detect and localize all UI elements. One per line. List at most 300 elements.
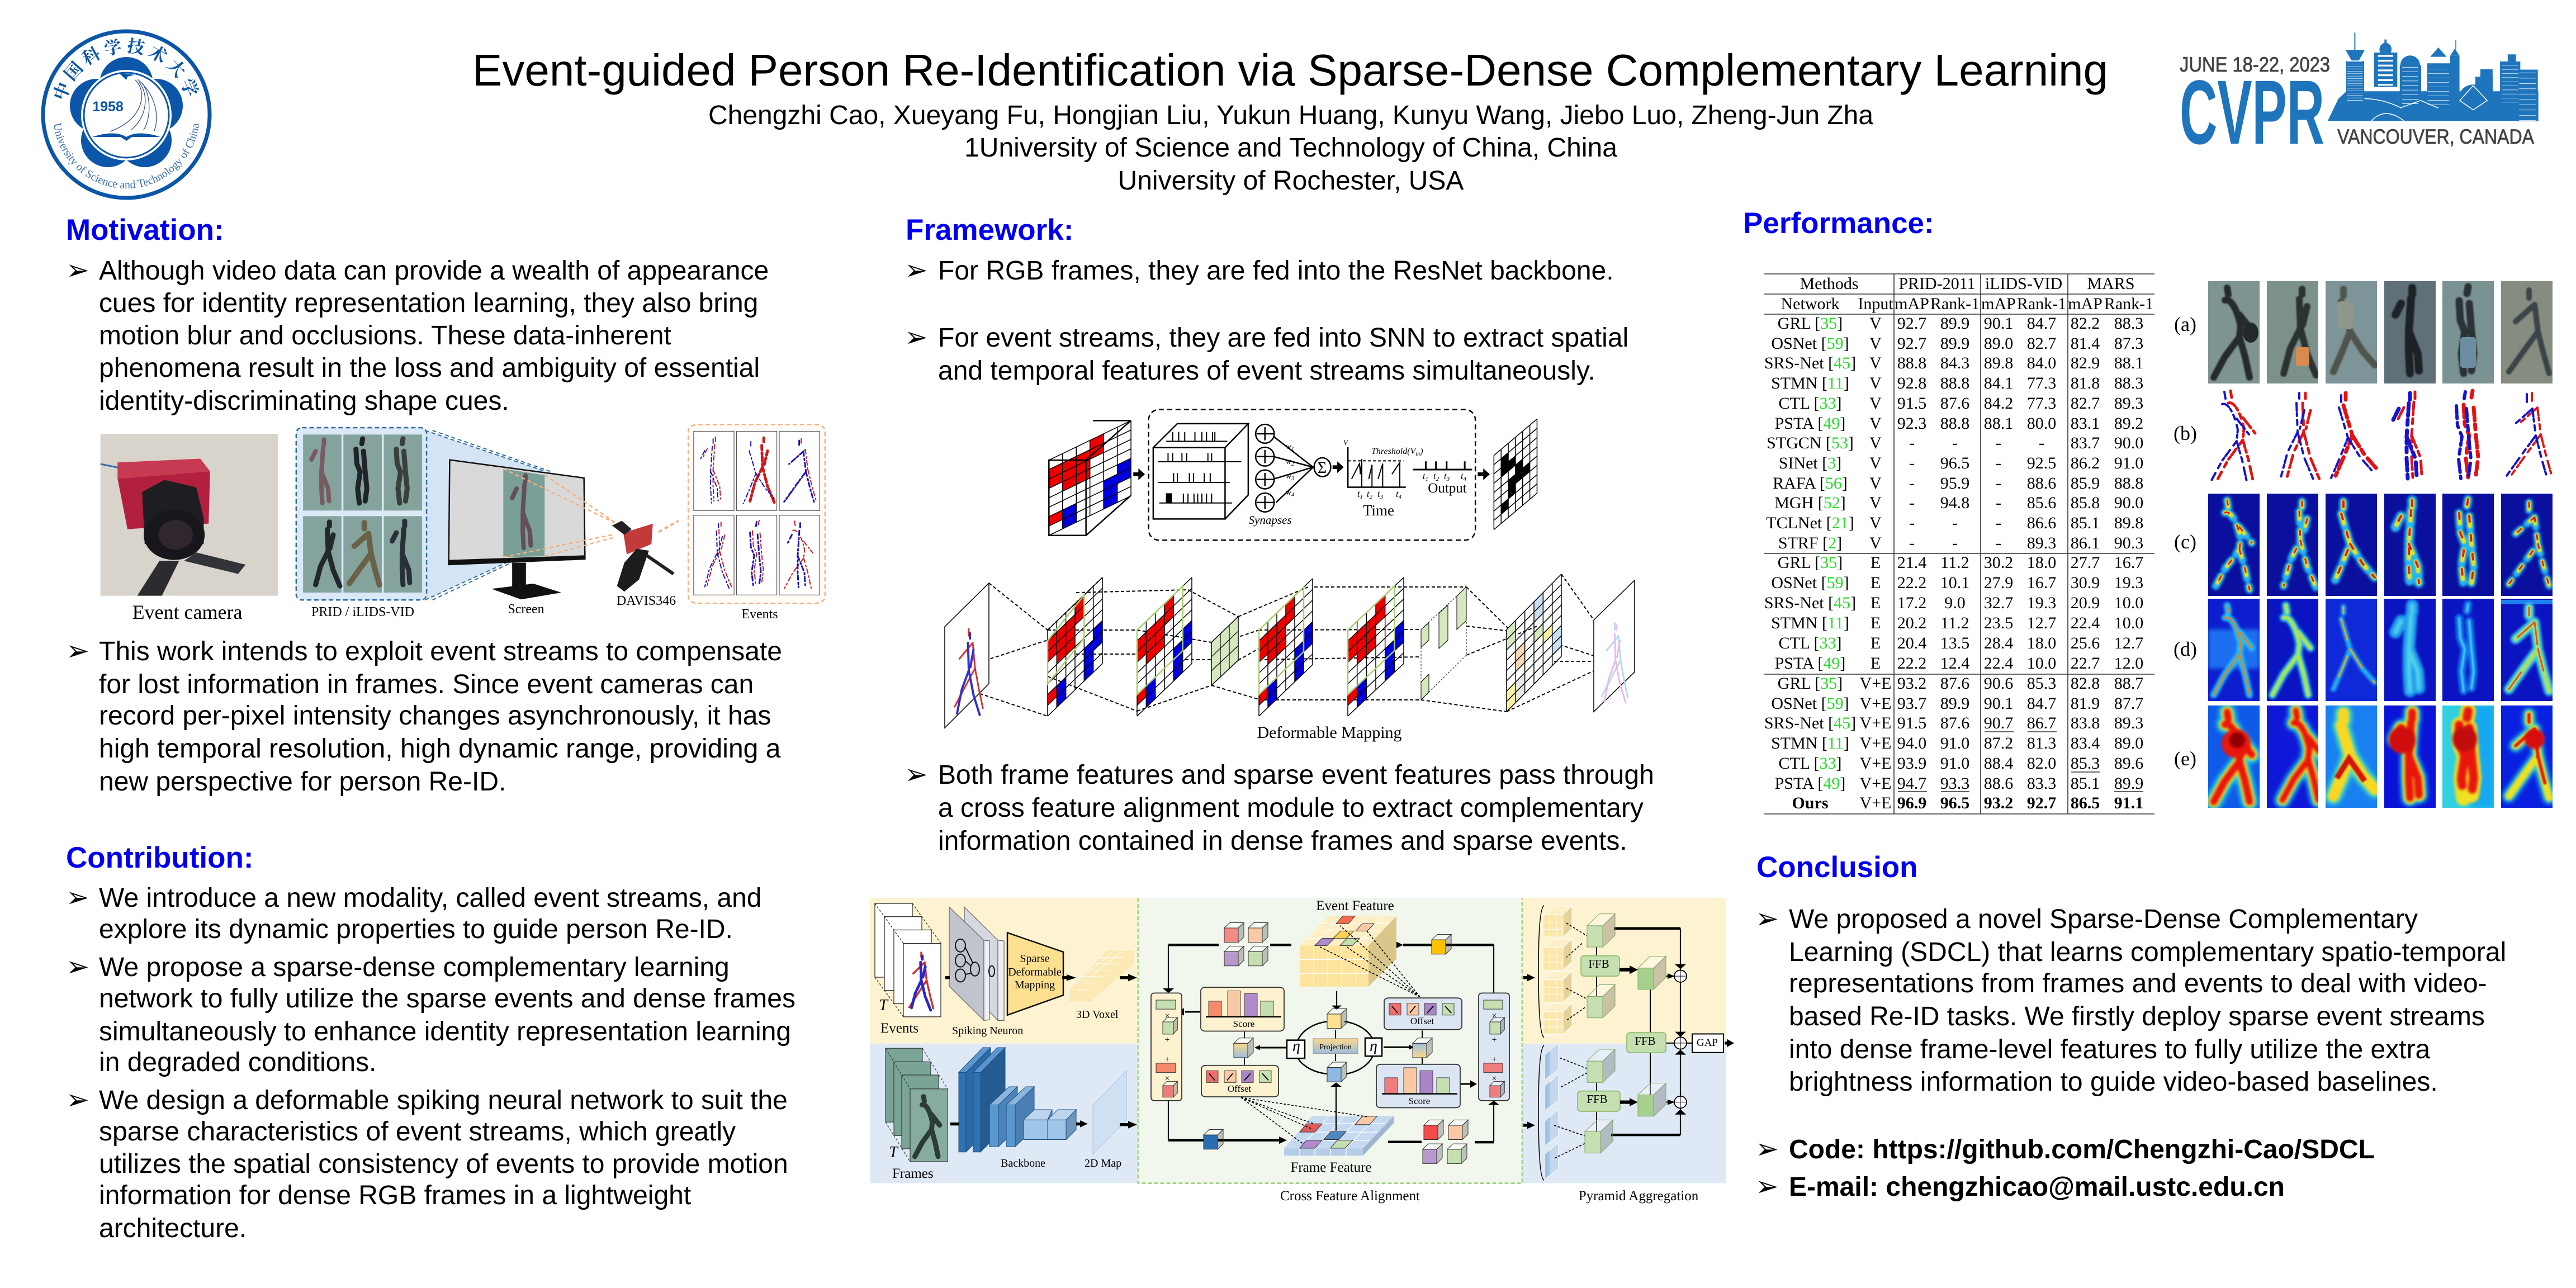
table: comparison results: 82.0	[2027, 754, 2056, 773]
logo: USTC university seal: 中国科学技术大学	[54, 37, 199, 99]
labels: architecture captions: 3D Voxel	[1076, 1008, 1119, 1021]
table: comparison results: 88.3	[2114, 314, 2143, 333]
input event cube	[1049, 420, 1131, 536]
table: comparison results: 83.1	[2071, 414, 2100, 433]
text block: conclusion summary: into dense frame-level features to fully utilize the extra	[1789, 1035, 2431, 1064]
text block: contribution bullets: ➢	[66, 950, 89, 983]
table: comparison results: E	[1871, 574, 1881, 592]
row d: frame feature heat maps	[2208, 599, 2553, 701]
labels: SNN captions: t	[1461, 471, 1464, 481]
table: comparison results: 84.0	[2027, 354, 2056, 372]
table: comparison results: 84.1	[1984, 374, 2013, 392]
labels: SNN captions: th	[1415, 451, 1420, 457]
table: comparison results: -	[1996, 494, 2001, 512]
labels: capture setup captions: PRID / iLIDS-VID	[311, 605, 414, 619]
table: comparison results: 85.9	[2071, 474, 2100, 493]
table: comparison results: 89.0	[1984, 334, 2013, 353]
labels: SNN captions: 3	[1291, 476, 1294, 482]
table: comparison results: STMN [11]	[1771, 614, 1849, 632]
text block: code and email links: Code: https://github.com/Chengzhi-Cao/SDCL	[1789, 1135, 2375, 1164]
table: comparison results: 22.2	[1897, 574, 1926, 592]
text block: contribution bullets: architecture.	[99, 1214, 247, 1243]
labels: architecture captions: Frames	[892, 1166, 934, 1181]
table: comparison results: 85.3	[2027, 674, 2056, 693]
labels: architecture captions: +	[1491, 1055, 1497, 1064]
table: comparison results: 85.8	[2071, 494, 2100, 512]
panel: performance	[1743, 207, 2553, 814]
table: comparison results: V	[1869, 434, 1882, 452]
offset panel (bottom)	[1201, 1066, 1278, 1097]
labels: architecture captions: +	[1164, 1035, 1170, 1045]
panel: motivation	[66, 214, 825, 797]
table: comparison results: 22.7	[2071, 654, 2100, 673]
text block: motivation second bullet: record per-pixel intensity changes asynchronously, it has	[99, 701, 771, 731]
table: comparison results: 84.2	[1984, 394, 2013, 413]
table: comparison results: E	[1871, 654, 1881, 673]
table: comparison results: 12.0	[2114, 654, 2143, 673]
labels: capture setup captions	[132, 594, 778, 623]
table: comparison results: Network	[1781, 295, 1839, 313]
labels: architecture captions: +	[1164, 1055, 1170, 1064]
table: comparison results: mAP	[1895, 295, 1929, 313]
score panel (top)	[1201, 987, 1284, 1031]
heading: framework: Framework:	[906, 214, 1073, 247]
text block: framework bullets top	[905, 254, 1628, 386]
table: comparison results: STRF [2]	[1778, 534, 1842, 552]
table: comparison results: 20.2	[1897, 614, 1926, 632]
labels: architecture captions: ×	[1491, 1074, 1497, 1083]
table: comparison results: SRS-Net [45]	[1764, 594, 1856, 612]
labels: architecture captions: Cross Feature Alignment	[1280, 1188, 1420, 1204]
table: comparison results: 11.2	[1940, 614, 1969, 632]
table: comparison results: MGH [52]	[1774, 494, 1846, 512]
table: comparison results: 84.7	[2027, 694, 2056, 713]
table: comparison results: 83.3	[2027, 774, 2056, 793]
text block: code and email links: ➢	[1755, 1133, 1779, 1165]
table: comparison results: 19.3	[2027, 594, 2056, 612]
table: comparison results: TCLNet [21]	[1766, 514, 1854, 532]
heading: performance: Performance:	[1743, 207, 1934, 240]
table: comparison results: 81.4	[2071, 334, 2100, 353]
table: comparison results: PSTA [49]	[1775, 414, 1845, 433]
input event image	[945, 583, 989, 728]
event sheets	[875, 903, 941, 1017]
text block: motivation second bullet: high temporal resolution, high dynamic range, providing a	[99, 734, 781, 764]
text block: contribution bullets: information for dense RGB frames in a lightweight	[99, 1181, 691, 1210]
table: comparison results: 82.2	[2071, 314, 2100, 333]
table: comparison results: 87.6	[1940, 714, 1969, 732]
table: comparison results: 90.3	[2114, 534, 2143, 552]
labels: SNN captions: Time	[1363, 502, 1394, 519]
table: comparison results: 93.2	[1984, 794, 2013, 812]
labels: visualization row labels: (e)	[2174, 747, 2196, 770]
labels: architecture captions: Event Feature	[1316, 898, 1394, 913]
labels: architecture captions: Sparse	[1020, 953, 1050, 965]
table: comparison results: E	[1871, 614, 1881, 632]
labels: visualization row labels: (c)	[2174, 531, 2196, 553]
table: comparison results: 88.8	[1897, 354, 1926, 372]
table: comparison results: V	[1869, 374, 1882, 392]
labels: architecture captions: +	[1491, 1035, 1497, 1045]
frame feature plate	[1241, 1097, 1394, 1156]
table: comparison results: V+E	[1860, 694, 1891, 713]
table: comparison results: 88.3	[2114, 374, 2143, 392]
labels: architecture captions: 2D Map	[1085, 1157, 1121, 1169]
labels: SNN captions: Output	[1428, 481, 1467, 496]
dashed green grid	[1421, 587, 1466, 700]
text block: framework third bullet	[905, 758, 1654, 856]
table: comparison results: 32.7	[1984, 594, 2013, 612]
table: comparison results: -	[1996, 454, 2001, 472]
text block: contribution bullets	[66, 881, 795, 1243]
table: comparison results: 28.4	[1984, 634, 2013, 652]
table: comparison results: 83.8	[2071, 714, 2100, 732]
text block: motivation second bullet: new perspective for person Re-ID.	[99, 767, 506, 797]
table: comparison results: OSNet [59]	[1771, 334, 1849, 353]
table: comparison results: PSTA [49]	[1775, 654, 1845, 673]
dashed connectors	[953, 574, 1594, 716]
table: comparison results: V	[1869, 454, 1882, 472]
table: comparison results: MARS	[2087, 274, 2135, 293]
labels: SNN captions: t	[1444, 471, 1447, 481]
table: comparison results: 94.8	[1940, 494, 1969, 512]
text block: motivation first bullet: cues for identity representation learning, they also bring	[99, 288, 758, 318]
text block: motivation second bullet	[66, 634, 782, 797]
table: comparison results: 87.6	[1940, 674, 1969, 693]
table: comparison results: OSNet [59]	[1771, 694, 1849, 713]
labels: capture setup captions: Event camera	[132, 601, 242, 623]
table: comparison results: -	[1909, 534, 1915, 552]
table: comparison results: V	[1869, 474, 1882, 493]
table: comparison results: 81.3	[2027, 734, 2056, 752]
table: comparison results: mAP	[1981, 295, 2016, 313]
offset panel (top)	[1384, 998, 1462, 1030]
table: comparison results: 90.1	[1984, 314, 2013, 333]
arrows: top branch	[945, 974, 1137, 981]
table: comparison results: 90.0	[2114, 434, 2143, 452]
labels: SNN captions: t	[1357, 489, 1360, 499]
table: comparison results: iLIDS-VID	[1985, 274, 2062, 293]
text block: framework bullets top: and temporal features of event streams simultaneously.	[938, 356, 1595, 386]
table: comparison results: 89.8	[2114, 514, 2143, 532]
labels: SNN captions: 4	[1399, 494, 1402, 500]
table: comparison results: 89.9	[1940, 334, 1969, 353]
table: comparison results: 23.5	[1984, 614, 2013, 632]
labels: SNN captions: 4	[1291, 492, 1294, 498]
table: comparison results: 89.6	[2114, 754, 2143, 773]
figure: event camera data capture setup	[101, 424, 825, 623]
text block: framework bullets top: ➢	[905, 254, 928, 286]
text block: framework third bullet: a cross feature alignment module to extract complementary	[938, 793, 1644, 823]
table: comparison results: 22.2	[1897, 654, 1926, 673]
arrows	[1133, 461, 1490, 480]
table: comparison results: -	[1909, 494, 1915, 512]
text block: conclusion summary: We proposed a novel Sparse-Dense Complementary	[1789, 905, 2418, 934]
table: comparison results: CTL [33]	[1778, 634, 1842, 652]
labels: SNN captions: 3	[1446, 476, 1450, 482]
table: comparison results: 88.8	[1940, 374, 1969, 392]
table: comparison results: mAP	[2068, 295, 2103, 313]
table: comparison results: -	[1952, 434, 1958, 452]
table: comparison results: 10.0	[2027, 654, 2056, 673]
table: comparison results: 12.7	[2027, 614, 2056, 632]
text block: framework bullets top: ➢	[905, 321, 928, 353]
table: comparison results: 85.1	[2071, 514, 2100, 532]
arrows: projection rays from screen to camera	[503, 468, 679, 557]
logo: USTC university seal: University of Science and Technology of China	[51, 122, 202, 191]
photo: event camera	[101, 434, 278, 596]
figure: person image rows	[2208, 281, 2553, 808]
labels: architecture captions: FFB	[1588, 957, 1609, 970]
labels: architecture captions	[879, 898, 1718, 1204]
diagram: spiking neural network	[1049, 410, 1537, 540]
text block: framework third bullet: information contained in dense frames and sparse events.	[938, 826, 1627, 856]
labels: SNN captions: 4	[1464, 476, 1467, 482]
table: comparison results: 82.7	[2071, 394, 2100, 413]
logo: USTC university seal: 1958	[92, 99, 124, 115]
labels: SNN captions: w	[1286, 442, 1291, 451]
icon: screen monitor	[449, 460, 585, 599]
table: comparison results: -	[1952, 514, 1958, 532]
table: comparison results: 92.7	[1897, 314, 1926, 333]
label: deformable mapping: Deformable Mapping	[1257, 723, 1402, 742]
labels: architecture captions: Events	[880, 1021, 918, 1036]
table: comparison results: 12.4	[1940, 654, 1969, 673]
table: comparison results: -	[1996, 534, 2001, 552]
labels: architecture captions: Deformable	[1008, 966, 1062, 978]
heading: motivation: Motivation:	[66, 214, 224, 247]
icon: DAVIS346 camera	[612, 521, 674, 591]
table: comparison results: 86.2	[2071, 454, 2100, 472]
small offset green grid	[1211, 617, 1238, 685]
labels: SNN captions: Σ	[1318, 460, 1327, 477]
labels: capture setup captions: DAVIS346	[617, 594, 676, 608]
logo: CVPR 2023 Vancouver	[2180, 32, 2539, 163]
table: comparison results: 88.6	[2027, 474, 2056, 493]
table: comparison results: 91.0	[1940, 754, 1969, 773]
labels: visualization row labels: (b)	[2174, 422, 2197, 444]
labels: SNN captions: 2	[1436, 476, 1439, 482]
output colour grid	[1507, 574, 1561, 712]
labels: architecture captions: Score	[1409, 1096, 1430, 1106]
table: comparison results: 92.3	[1897, 414, 1926, 433]
membrane potential chart	[1348, 447, 1472, 487]
table: comparison results: 13.5	[1940, 634, 1969, 652]
labels: architecture captions: Spiking Neuron	[952, 1025, 1023, 1037]
text block: framework bullets top: For event streams, they are fed into SNN to extract spatial	[938, 323, 1628, 353]
table: comparison results: 81.9	[2071, 694, 2100, 713]
text block: motivation first bullet: motion blur and occlusions. These data-inherent	[99, 321, 671, 351]
table: comparison results: E	[1871, 634, 1881, 652]
table: comparison results: 85.1	[2071, 774, 2100, 793]
labels: SNN captions: 2	[1291, 461, 1294, 467]
table: comparison results: E	[1871, 553, 1881, 572]
table: comparison results: 91.0	[1940, 734, 1969, 752]
table: comparison results: 90.7	[1984, 714, 2013, 732]
3D voxel	[1069, 950, 1135, 1002]
table: comparison results: -	[1909, 454, 1915, 472]
table: comparison results: 88.1	[2114, 354, 2143, 372]
table: comparison results: 18.0	[2027, 634, 2056, 652]
table: comparison results: V	[1869, 494, 1882, 512]
table: comparison results: STMN [11]	[1771, 734, 1849, 752]
projection node	[1287, 1038, 1382, 1058]
table: comparison results: SINet [3]	[1779, 454, 1841, 472]
labels: architecture captions: Offset	[1410, 1016, 1434, 1026]
table: comparison results: -	[1909, 434, 1915, 452]
text block: motivation second bullet: This work intends to exploit event streams to compensate	[99, 637, 782, 666]
table: comparison results: SRS-Net [45]	[1764, 714, 1856, 732]
table: comparison results: Input	[1858, 295, 1893, 313]
table: comparison results: 94.7	[1897, 774, 1926, 793]
text block: motivation first bullet: Although video data can provide a wealth of appearance	[99, 256, 769, 286]
table: comparison results: 20.4	[1897, 634, 1926, 652]
event feature cube	[1300, 916, 1420, 997]
table: comparison results: 85.6	[2027, 494, 2056, 512]
table: comparison results: Rank-1	[2017, 295, 2066, 313]
table: comparison results: CTL [33]	[1778, 754, 1842, 773]
labels: SNN captions: 1	[1291, 446, 1294, 452]
table: comparison results: 81.8	[2071, 374, 2100, 392]
labels: SNN captions	[1249, 438, 1467, 527]
row b: event frames	[2211, 391, 2552, 481]
authors and affiliations: 1University of Science and Technology of China, China	[964, 133, 1617, 163]
labels: SNN captions: 2	[1370, 494, 1373, 500]
sparse deformable mapping block	[1007, 932, 1063, 1015]
text block: framework bullets top: For RGB frames, they are fed into the ResNet backbone.	[938, 256, 1614, 286]
table: comparison results: 86.1	[2071, 534, 2100, 552]
table: comparison results: 96.9	[1897, 794, 1926, 812]
table: comparison results: STMN [11]	[1771, 374, 1849, 392]
table: comparison results: -	[1952, 534, 1958, 552]
table: comparison results: V	[1869, 314, 1882, 333]
table: comparison results: 77.3	[2027, 374, 2056, 392]
text block: contribution bullets: We propose a sparse-dense complementary learning	[99, 953, 730, 982]
table: comparison results: 22.4	[1984, 654, 2013, 673]
table: comparison results: 87.6	[1940, 394, 1969, 413]
table: comparison results: 91.0	[2114, 454, 2143, 472]
labels: capture setup captions: Events	[741, 607, 778, 622]
table: comparison results: RAFA [56]	[1773, 474, 1848, 493]
table: comparison results: 93.2	[1897, 674, 1926, 693]
text block: motivation first bullet: identity-discriminating shape cues.	[99, 386, 509, 416]
labels: SNN captions: w	[1286, 488, 1291, 497]
diagram: overall SDCL architecture	[870, 898, 1734, 1204]
table: comparison results: 88.6	[1984, 774, 2013, 793]
panel: conclusion	[1755, 851, 2506, 1202]
logo: CVPR 2023 Vancouver: CVPR	[2180, 61, 2324, 163]
table: comparison results: 89.9	[1940, 314, 1969, 333]
text block: code and email links	[1755, 1133, 2375, 1202]
labels: SNN captions: )	[1419, 447, 1423, 456]
row c: event feature heat maps	[2208, 494, 2553, 596]
labels: SNN captions: 1	[1426, 476, 1428, 482]
table: comparison results: V+E	[1860, 754, 1891, 773]
labels: visualization row labels	[2174, 313, 2197, 770]
labels: SNN captions: Threshold(V	[1371, 447, 1415, 456]
text block: contribution bullets: ➢	[66, 1083, 89, 1116]
table: comparison results: -	[1996, 474, 2001, 493]
table: comparison results: 82.8	[2071, 674, 2100, 693]
labels: architecture captions: Projection	[1319, 1043, 1352, 1052]
table: comparison results: V	[1869, 534, 1882, 552]
table: comparison results: 85.3	[2071, 754, 2100, 773]
table: comparison results: 89.3	[2114, 714, 2143, 732]
arrows: bottom branch	[950, 974, 1535, 1129]
labels: SNN captions: t	[1377, 489, 1380, 499]
table: comparison results: 16.7	[2114, 553, 2143, 572]
output colourful image	[1594, 580, 1635, 712]
labels: visualization row labels: (a)	[2174, 313, 2196, 335]
text block: conclusion summary: Learning (SDCL) that learns complementary spatio-temporal	[1789, 937, 2506, 967]
table: comparison results: 92.7	[2027, 794, 2056, 812]
labels: architecture captions: ×	[1164, 1011, 1170, 1021]
pyramid aggregation	[1538, 906, 1734, 1180]
table: comparison results: 20.9	[2071, 594, 2100, 612]
table: comparison results: Methods	[1800, 274, 1858, 293]
table: comparison results: 94.0	[1897, 734, 1926, 752]
logo: CVPR 2023 Vancouver: VANCOUVER, CANADA	[2337, 125, 2534, 148]
table: comparison results: 89.0	[2114, 734, 2143, 752]
score panel (bottom)	[1376, 1064, 1460, 1108]
text block: motivation first bullet	[66, 254, 769, 416]
table: comparison results: GRL [35]	[1778, 314, 1843, 333]
text block: motivation first bullet: ➢	[66, 254, 89, 286]
table: comparison results: 95.9	[1940, 474, 1969, 493]
table: comparison results: 19.3	[2114, 574, 2143, 592]
table: comparison results: 10.0	[2114, 594, 2143, 612]
table: comparison results: 10.0	[2114, 614, 2143, 632]
dashed SNN box	[1149, 410, 1475, 540]
labels: SNN captions: w	[1286, 472, 1291, 481]
text block: contribution bullets: utilizes the spatial consistency of events to provide motion	[99, 1149, 788, 1179]
table: comparison results: 11.2	[1940, 553, 1969, 572]
spike train cube	[1153, 424, 1248, 519]
table: comparison results: V	[1869, 514, 1882, 532]
authors and affiliations: Chengzhi Cao, Xueyang Fu, Hongjian Liu, Yukun Huang, Kunyu Wang, Jiebo Luo, Zheng-Jun Zha	[708, 101, 1873, 130]
table: comparison results: V+E	[1860, 734, 1891, 752]
labels: architecture captions: Score	[1233, 1019, 1254, 1029]
table: comparison results: 92.8	[1897, 374, 1926, 392]
table: comparison results: 84.7	[2027, 314, 2056, 333]
labels: SNN captions: 3	[1380, 494, 1384, 500]
logo: USTC university seal	[43, 31, 210, 198]
table: comparison results: V	[1869, 414, 1882, 433]
labels: architecture captions: ×	[1164, 1074, 1170, 1083]
text block: contribution bullets: sparse characteristics of event streams, which greatly	[99, 1117, 736, 1147]
backbone blocks	[959, 1048, 1076, 1152]
side columns	[1151, 993, 1509, 1101]
table: comparison results: 27.9	[1984, 574, 2013, 592]
table: comparison results: GRL [35]	[1778, 553, 1843, 572]
table: comparison results: 88.8	[2114, 474, 2143, 493]
table: comparison results: 89.9	[1940, 694, 1969, 713]
labels: architecture captions: Backbone	[1001, 1157, 1045, 1169]
table: comparison results: -	[1909, 474, 1915, 493]
table: comparison results: 88.7	[2114, 674, 2143, 693]
labels: visualization row labels: (d)	[2174, 638, 2197, 660]
flow lines in cross feature alignment	[1168, 945, 1494, 1142]
synapse neurons	[1256, 424, 1330, 512]
labels: architecture captions: Mapping	[1015, 979, 1055, 991]
table: comparison results: OSNet [59]	[1771, 574, 1849, 592]
feature layers	[1048, 577, 1404, 716]
text block: conclusion summary: ➢	[1755, 902, 1779, 935]
labels: SNN captions: 1	[1360, 494, 1363, 500]
table: comparison results: 84.3	[1940, 354, 1969, 372]
text block: conclusion summary	[1755, 902, 2506, 1097]
table: comparison results: 89.9	[2114, 774, 2143, 793]
